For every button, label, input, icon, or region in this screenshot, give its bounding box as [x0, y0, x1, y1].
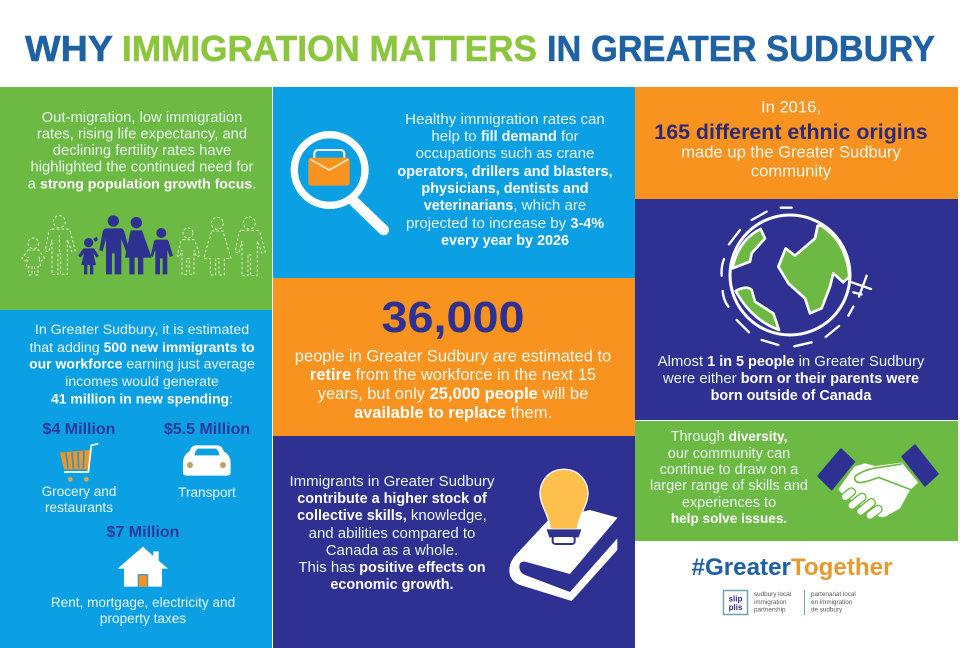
diversity text: larger range of skills and [650, 478, 808, 494]
icon: handshake [818, 445, 938, 517]
stat: housing: property taxes [100, 611, 186, 626]
panel: ethnic origins [635, 87, 958, 199]
skills text: economic growth. [330, 577, 454, 593]
demand text: Healthy immigration rates can [405, 111, 605, 128]
panel: new spending [0, 310, 272, 648]
panel: diversity [635, 421, 958, 541]
diversity text: Through diversity, [671, 429, 787, 445]
title [25, 28, 935, 69]
population text: rates, rising life expectancy, and [37, 126, 247, 142]
panel: skills [273, 436, 635, 648]
diversity text: continue to draw on a [660, 462, 799, 478]
skills text: contribute a higher stock of [297, 491, 487, 507]
spending intro text: incomes would generate [65, 374, 219, 390]
stat: grocery [42, 421, 116, 515]
title: IMMIGRATION MATTERS [122, 28, 537, 69]
logo: partnership: immigration [754, 599, 787, 606]
panel: retirement [273, 278, 635, 436]
icon: family with dashed outlines [22, 215, 265, 276]
globe text [658, 354, 925, 404]
origins text: 165 different ethnic origins [654, 120, 928, 144]
icon: shopping cart [60, 444, 98, 482]
stat: transport: Transport [178, 485, 236, 500]
globe text: born outside of Canada [711, 388, 872, 404]
title: IN GREATER SUDBURY [547, 28, 935, 69]
logo: partnership: partenariat local [811, 591, 856, 598]
demand text: help to fill demand for [431, 128, 579, 145]
stat: housing [51, 524, 235, 626]
logo: partnership: de sudbury [811, 606, 843, 614]
stat: housing: $7 Million [107, 524, 179, 541]
skills text: Immigrants in Greater Sudbury [289, 473, 495, 490]
spending intro text [29, 322, 255, 408]
diversity text: help solve issues. [671, 511, 787, 526]
skills text: Canada as a whole. [326, 542, 458, 559]
spending intro text: In Greater Sudbury, it is estimated [35, 322, 249, 338]
skills text: and abilities compared to [309, 525, 475, 542]
hashtag: #GreaterTogether [692, 554, 892, 581]
icon: car [183, 445, 231, 476]
demand text: every year by 2026 [441, 233, 569, 249]
icon: book and light bulb [509, 469, 618, 601]
origins text: community [751, 162, 832, 180]
panel: born outside Canada [635, 199, 958, 420]
population text [28, 110, 256, 192]
stat: housing: Rent, mortgage, electricity and [51, 595, 235, 610]
demand text: operators, drillers and blasters, [397, 164, 613, 180]
retirement text: years, but only 25,000 people will be [318, 385, 588, 403]
retirement text: retire from the workforce in the next 15 [310, 366, 596, 384]
icon: globe with plane [722, 208, 871, 346]
demand text: veterinarians, which are [424, 197, 586, 214]
logo: partnership: sudbury local [754, 591, 791, 598]
dashed figures [22, 216, 265, 276]
origins text: In 2016, [761, 98, 821, 116]
logo: partnership: slip [729, 594, 743, 604]
panel: population growth [0, 87, 272, 310]
population text: Out-migration, low immigration [42, 110, 242, 126]
diversity text: our community can [668, 446, 790, 462]
diversity text: experiences to [682, 495, 776, 511]
retirement text: available to replace them. [354, 404, 552, 422]
spending intro text: that adding 500 new immigrants to [29, 339, 255, 356]
globe text: Almost 1 in 5 people in Greater Sudbury [658, 354, 925, 370]
stat: transport [164, 421, 250, 500]
stat: transport: $5.5 Million [164, 421, 250, 438]
origins text [654, 98, 928, 180]
skills text [289, 473, 495, 593]
retirement text: people in Greater Sudbury are estimated to [295, 348, 611, 366]
origins text: made up the Greater Sudbury [681, 142, 901, 162]
demand text: projected to increase by 3-4% [406, 215, 604, 232]
diversity text [650, 429, 808, 526]
skills text: This has positive effects on [298, 559, 486, 576]
stat: grocery: Grocery and [42, 484, 116, 499]
logo: partnership: en immigration [811, 599, 853, 606]
logo: partnership: partnership [754, 606, 786, 614]
title: WHY [25, 28, 113, 69]
demand text: physicians, dentists and [421, 181, 589, 197]
demand text [397, 111, 613, 249]
spending intro text: 41 million in new spending: [51, 390, 233, 408]
icon: magnifying glass with envelope [294, 135, 384, 230]
globe text: were either born or their parents were [662, 371, 919, 387]
demand text: occupations such as crane [416, 145, 594, 162]
stat: grocery: $4 Million [43, 421, 115, 438]
big number: 36,000 [382, 293, 524, 342]
logo: partnership [724, 590, 856, 615]
stat: grocery: restaurants [45, 500, 113, 515]
spending intro text: our workforce earning just average [29, 356, 255, 372]
retirement text [295, 348, 611, 422]
logo: partnership: plis [729, 603, 743, 612]
population text: declining fertility rates have [53, 143, 231, 159]
population text: highlighted the continued need for [31, 160, 254, 176]
skills text: collective skills, knowledge, [297, 507, 487, 524]
panel: fill demand [273, 87, 635, 278]
population text: a strong population growth focus. [28, 176, 256, 192]
solid family [78, 215, 173, 274]
icon: house [118, 547, 168, 587]
